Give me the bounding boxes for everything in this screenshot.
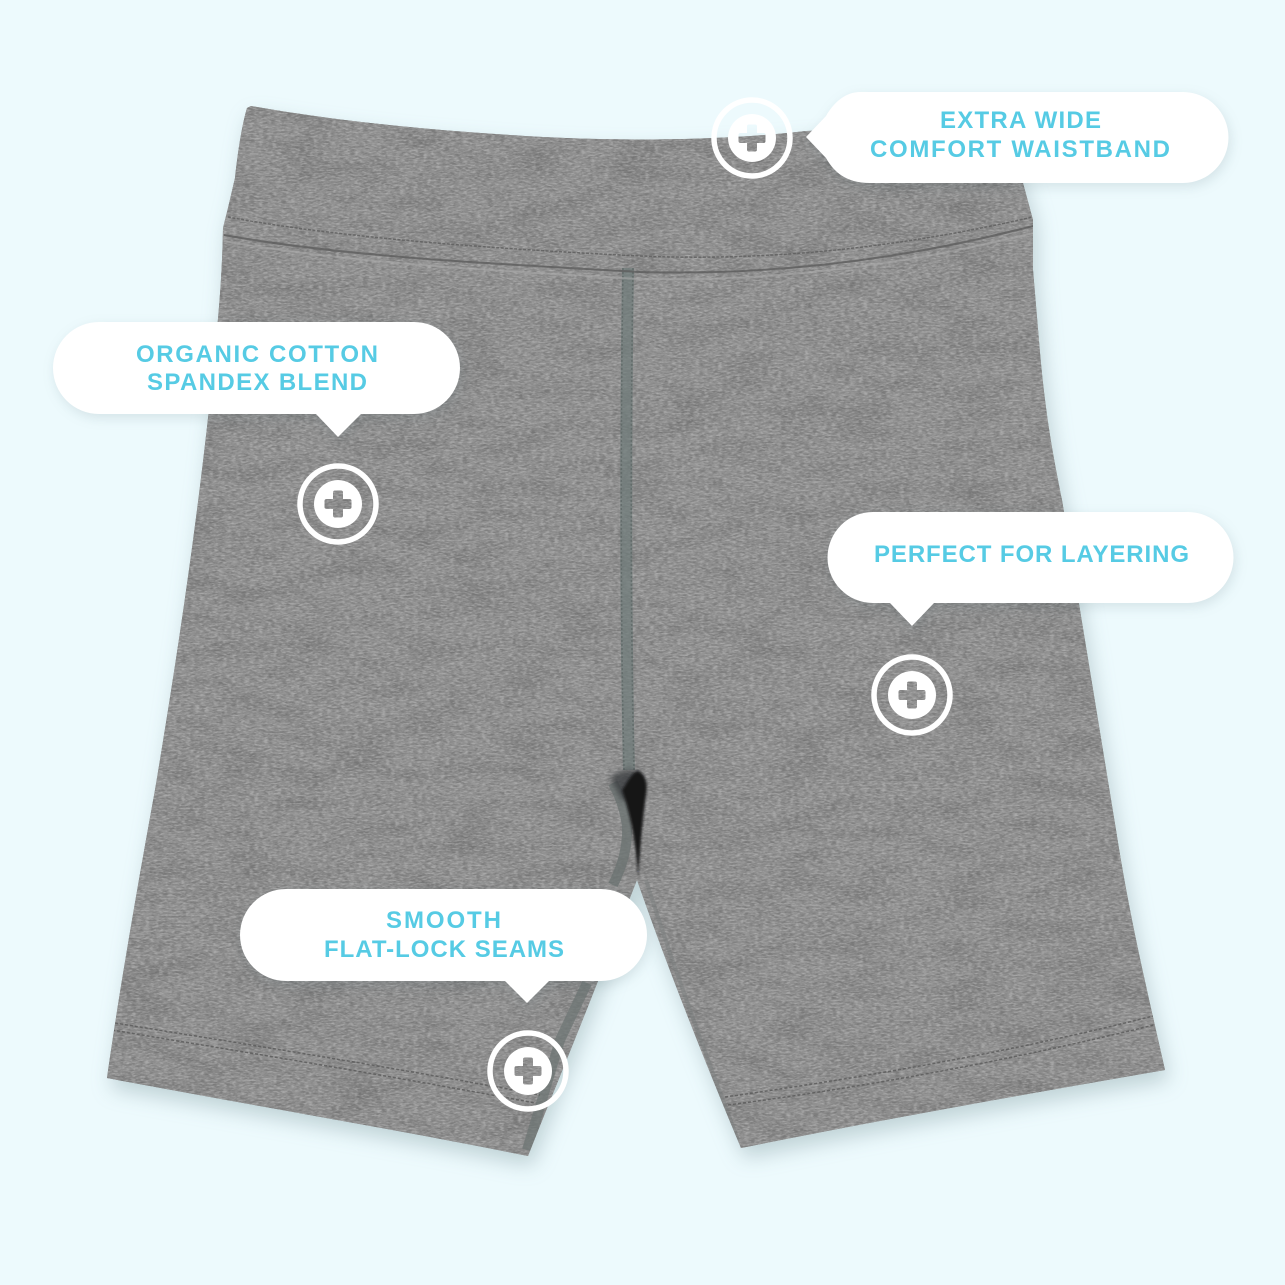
marker: waistband [714, 100, 790, 176]
crotch opening [622, 771, 647, 880]
callout: extra wide comfort waistband [806, 92, 1228, 183]
callout: smooth flat-lock seams: SMOOTH [386, 907, 501, 934]
inner leg seam [613, 783, 627, 885]
shorts garment [90, 90, 1190, 1170]
marker: layering [874, 657, 950, 733]
callout: organic cotton spandex blend [53, 322, 460, 437]
marker: cotton blend [300, 466, 376, 542]
crotch shadow [610, 770, 640, 800]
callout: perfect for layering [828, 512, 1234, 626]
left hem stitching [115, 1023, 540, 1095]
callout: smooth flat-lock seams: FLAT-LOCK SEAMS [324, 936, 564, 963]
callout: extra wide comfort waistband: EXTRA WIDE [940, 107, 1101, 134]
right hem stitching [725, 1015, 1157, 1097]
waistband stitching [228, 217, 1033, 257]
callout: organic cotton spandex blend: ORGANIC COTTON [136, 341, 378, 368]
center seam [626, 268, 629, 770]
callout: extra wide comfort waistband: COMFORT WAISTBAND [870, 136, 1170, 163]
callout: smooth flat-lock seams [240, 889, 647, 1003]
marker: seams [490, 1033, 566, 1109]
callout: organic cotton spandex blend: SPANDEX BLEND [147, 369, 367, 396]
callout: perfect for layering: PERFECT FOR LAYERING [874, 541, 1189, 568]
